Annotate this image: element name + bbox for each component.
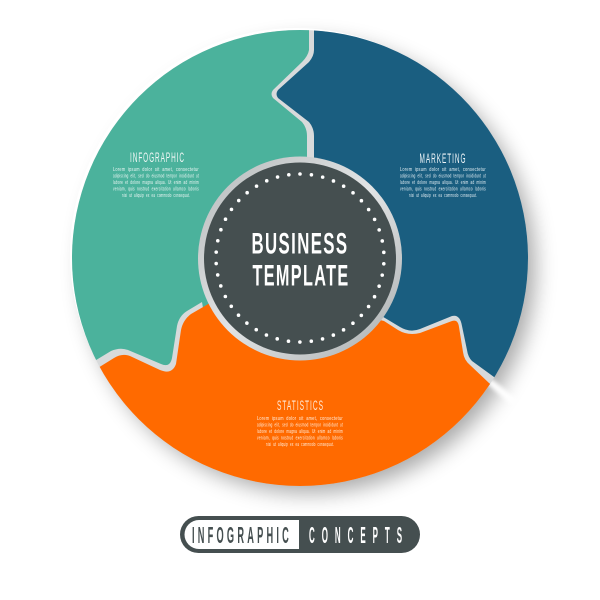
text block: Lorem ipsum dolor sit amet, consectetur (257, 416, 343, 422)
badge body (180, 516, 420, 553)
text block: labore et dolore magna aliqua. Ut enim ad minim (113, 180, 199, 186)
center hub (198, 156, 402, 360)
panel: statistics segment: STATISTICS (277, 398, 324, 413)
hub title: BUSINESS (252, 228, 348, 260)
panel: marketing segment (276, 30, 528, 378)
panel: infographic segment: INFOGRAPHIC (130, 150, 185, 165)
panel: statistics segment (100, 304, 490, 486)
hub disc (204, 162, 396, 354)
text block (257, 416, 343, 448)
white cover hiding shadow upper left (70, 28, 522, 480)
text block: veniam, quis nostrud exercitation ullamco laboris (257, 436, 343, 442)
text block: Lorem ipsum dolor sit amet, consectetur (113, 167, 199, 173)
text block: adipiscing elit, sed do eiusmod tempor incididunt ut (113, 174, 199, 180)
infographic canvas (70, 28, 548, 553)
text block: veniam, quis nostrud exercitation ullamco laboris (400, 186, 486, 192)
white gap in shadow at lower right (489, 381, 514, 402)
text block: nisi ut aliquip ex ea commodo consequat. (122, 193, 190, 199)
text block (113, 167, 199, 199)
text block: labore et dolore magna aliqua. Ut enim ad minim (257, 429, 343, 435)
wheel base (72, 30, 528, 486)
text block: Lorem ipsum dolor sit amet, consectetur (400, 167, 486, 173)
drop shadow of wheel (83, 41, 535, 493)
panel: infographic segment (72, 30, 309, 366)
footer badge: INFOGRAPHIC (192, 522, 292, 548)
text block: adipiscing elit, sed do eiusmod tempor incididunt ut (400, 174, 486, 180)
text block (400, 167, 486, 199)
hub ring (198, 156, 402, 360)
text block: labore et dolore magna aliqua. Ut enim ad minim (400, 180, 486, 186)
hub title: TEMPLATE (252, 260, 350, 292)
hub title (252, 228, 350, 292)
text block: nisi ut aliquip ex ea commodo consequat. (409, 193, 477, 199)
infographic canvas: CONCEPTS (309, 522, 409, 548)
text block: nisi ut aliquip ex ea commodo consequat. (266, 442, 334, 448)
panel: marketing segment: MARKETING (420, 151, 466, 166)
footer badge (180, 516, 420, 553)
text block: adipiscing elit, sed do eiusmod tempor incididunt ut (257, 422, 343, 428)
badge white part (184, 520, 299, 549)
text block: veniam, quis nostrud exercitation ullamco laboris (113, 186, 199, 192)
dotted ring (216, 174, 384, 342)
